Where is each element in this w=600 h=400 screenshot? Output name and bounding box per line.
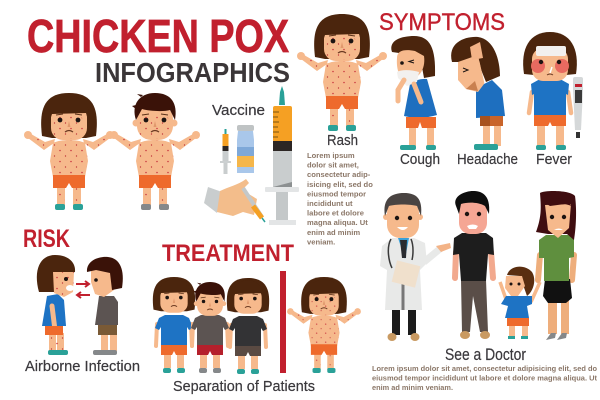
rash description: magna aliqua. Ut: [307, 218, 368, 227]
icon: thermometer: [573, 77, 583, 138]
airborne label: Airborne Infection: [25, 358, 140, 375]
illustration: mother: [536, 191, 576, 340]
doctor description: Lorem ipsum dolor sit amet, consectetur adipisicing elit, sed do: [372, 364, 597, 373]
icon: large syringe: [265, 86, 299, 225]
symptom labels: [400, 151, 572, 168]
title: [27, 10, 290, 88]
separation line: [280, 271, 286, 373]
rash description: veniam.: [307, 237, 335, 246]
illustration: cough: [391, 36, 437, 150]
illustration: child: [500, 267, 540, 339]
separation label: Separation of Patients: [173, 378, 315, 395]
vaccine label: Vaccine: [212, 102, 265, 119]
illustration: headache: [451, 37, 505, 150]
icon: small syringe: [220, 129, 231, 174]
illustration: boy with rash: [110, 93, 200, 210]
illustration: father: [453, 191, 494, 339]
icon: vial: [237, 125, 254, 173]
symptom labels: Headache: [457, 151, 518, 168]
rash description: eiusmod tempor: [307, 189, 366, 198]
doctor description: enim ad minim veniam.: [372, 383, 453, 392]
rash description: isicing elit, sed do: [307, 180, 373, 189]
icon: hand with syringe: [204, 179, 265, 222]
title: CHICKEN POX: [27, 10, 289, 62]
doctor description: eiusmod tempor incididunt ut labore et dolore magna aliqua. Ut: [372, 374, 597, 382]
see a doctor label: See a Doctor: [445, 345, 526, 364]
treatment heading: TREATMENT: [162, 240, 294, 267]
illustration: separated healthy kids: [153, 277, 269, 374]
rash description: enim ad minim: [307, 228, 360, 237]
symptoms heading: SYMPTOMS: [379, 9, 505, 36]
rash description: labore et dolore: [307, 209, 364, 218]
rash description: dolor sit amet,: [307, 161, 359, 170]
illustration: airborne infection: [37, 255, 123, 355]
rash description: consectetur adip-: [307, 170, 371, 179]
illustration: fever: [523, 32, 577, 150]
illustration: rash symptom: [297, 14, 387, 131]
illustration: isolated patient: [287, 277, 361, 373]
title: INFOGRAPHICS: [95, 57, 290, 88]
illustration: girl with rash: [24, 93, 114, 210]
symptom labels: Cough: [400, 151, 440, 168]
rash description: incididunt ut: [307, 199, 353, 208]
risk heading: RISK: [23, 225, 70, 253]
rash label: Rash: [327, 132, 358, 149]
symptom labels: Fever: [536, 151, 572, 168]
illustration: doctor: [380, 193, 451, 341]
rash description: Lorem ipsum: [307, 151, 355, 160]
